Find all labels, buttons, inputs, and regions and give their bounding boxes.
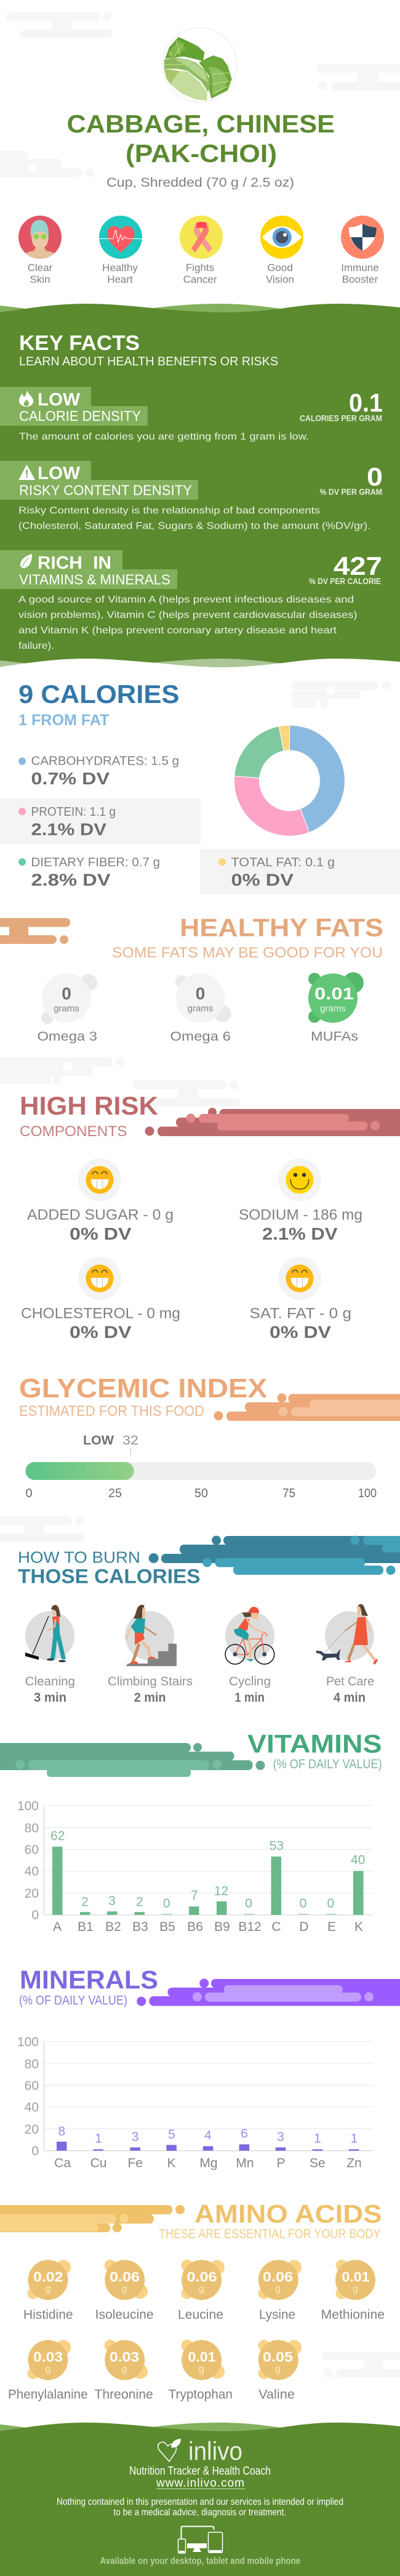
legend: protein: 2.1% DV xyxy=(31,820,106,839)
benefit: healthy heart xyxy=(99,216,142,259)
amino: lysine: 0.06 xyxy=(263,2269,293,2285)
minerals subheading: (% OF DAILY VALUE) xyxy=(19,1993,127,2007)
activity: climbing stairs: 2 min xyxy=(134,1691,166,1705)
description: (Cholesterol, Saturated Fat, Sugars & Sodium) to the amount (%DV/gr). xyxy=(18,521,370,531)
label: clear skin xyxy=(28,262,53,285)
amino: histidine: Histidine xyxy=(23,2307,73,2322)
description xyxy=(18,595,357,651)
mufas xyxy=(308,972,364,1044)
saturated fat: SAT. FAT - 0 g xyxy=(250,1306,351,1322)
unit: CALORIES PER GRAM xyxy=(300,414,382,423)
bar chart: minerals: 60 xyxy=(25,2079,39,2093)
amino: histidine xyxy=(23,2260,73,2322)
bar chart: vitamins: 2 xyxy=(136,1895,143,1909)
bar chart: vitamins: 100 xyxy=(17,1799,39,1813)
glycemic value label: 32 xyxy=(122,1434,138,1448)
bar chart: minerals: 100 xyxy=(17,2035,39,2049)
bar chart: minerals: 3 xyxy=(277,2130,284,2144)
bar chart: minerals: 0 xyxy=(31,2144,39,2158)
amino: valine: g xyxy=(275,2364,281,2375)
label: fights cancer xyxy=(183,262,217,285)
amino: threonine: Threonine xyxy=(94,2387,153,2402)
activity: cycling: 1 min xyxy=(234,1691,265,1705)
legend: protein xyxy=(0,798,201,844)
amino: threonine xyxy=(94,2340,153,2402)
label: good vision: Vision xyxy=(266,274,294,285)
bar chart: minerals: 1 xyxy=(351,2131,358,2145)
activity: pet care: Pet Care xyxy=(326,1675,374,1689)
bar chart: minerals: 1 xyxy=(314,2131,321,2145)
brush decoration xyxy=(0,918,70,944)
mufas: MUFAs xyxy=(311,1030,358,1044)
amino: lysine: g xyxy=(275,2283,281,2294)
legend: dietary fiber: 2.8% DV xyxy=(31,871,111,890)
bar chart: vitamins: 40 xyxy=(351,1853,365,1867)
label: fights cancer: Cancer xyxy=(183,274,217,285)
bar chart: vitamins: 0 xyxy=(245,1896,252,1911)
bar chart: vitamins: B3 xyxy=(132,1920,148,1934)
description: The amount of calories you are getting from 1 gram is low. xyxy=(19,431,309,442)
added sugar: 0% DV xyxy=(70,1224,132,1243)
availability note: Available on your desktop, tablet and mobile phone xyxy=(100,2556,300,2566)
label: clear skin: Skin xyxy=(30,274,50,285)
bar chart: vitamins: 0 xyxy=(163,1896,170,1911)
amino: methionine: 0.01 xyxy=(342,2269,369,2285)
key facts heading: KEY FACTS xyxy=(19,331,140,355)
high risk heading: HIGH RISK xyxy=(20,1091,158,1120)
bar chart: vitamins: B2 xyxy=(105,1920,121,1934)
omega 3: grams xyxy=(54,1004,79,1014)
bar chart: vitamins: B1 xyxy=(78,1920,94,1934)
title: CABBAGE, CHINESE xyxy=(66,110,335,138)
label: healthy heart: Heart xyxy=(107,274,133,285)
icon: leaf xyxy=(20,554,32,568)
saturated fat: 0% DV xyxy=(270,1322,331,1342)
bar chart: minerals: P xyxy=(276,2156,286,2170)
legend: protein: PROTEIN: 1.1 g xyxy=(31,805,116,819)
label: immune booster xyxy=(341,262,379,285)
website: www.inlivo.com xyxy=(156,2477,244,2490)
panel: footer xyxy=(0,2423,400,2576)
bar chart: minerals: 8 xyxy=(58,2124,65,2139)
description: failure). xyxy=(18,641,54,651)
panel: calories xyxy=(0,680,400,895)
benefit: immune booster xyxy=(341,216,384,259)
low label: LOW xyxy=(38,463,81,483)
legend: dietary fiber: DIETARY FIBER: 0.7 g xyxy=(31,856,160,869)
activity: climbing stairs: Climbing Stairs xyxy=(108,1675,193,1689)
label: fights cancer: Fights xyxy=(186,262,214,274)
legend: carbohydrates xyxy=(18,755,179,788)
panel: amino acids xyxy=(0,2200,385,2402)
amino: tryptophan xyxy=(169,2340,233,2402)
bar chart: vitamins: B6 xyxy=(187,1920,203,1934)
activity: cleaning: Cleaning xyxy=(25,1675,75,1689)
bar chart: vitamins: 62 xyxy=(50,1829,65,1843)
bar chart: vitamins: D xyxy=(299,1920,309,1934)
omega 3: Omega 3 xyxy=(37,1030,97,1044)
amino acids heading: AMINO ACIDS xyxy=(194,2200,382,2229)
bar chart: minerals: 20 xyxy=(25,2123,39,2137)
icon: flame xyxy=(19,390,33,407)
activity: climbing stairs xyxy=(108,1605,193,1705)
panel: glycemic index xyxy=(19,1373,400,1500)
brush decoration xyxy=(137,1979,400,2006)
mufas: grams xyxy=(320,1004,346,1014)
description: and Vitamin K (helps prevent coronary artery disease and heart xyxy=(18,625,337,636)
label: immune booster: Booster xyxy=(342,274,378,285)
value: 0.1 xyxy=(349,388,383,417)
bar chart: minerals: 1 xyxy=(95,2131,102,2145)
bar chart: vitamins: C xyxy=(271,1920,281,1934)
omega 6 xyxy=(170,973,231,1044)
amino: valine: 0.05 xyxy=(263,2349,293,2365)
minerals heading: MINERALS xyxy=(20,1965,158,1994)
value: 427 xyxy=(334,551,382,580)
glycemic axis xyxy=(26,1487,377,1500)
omega 6: Omega 6 xyxy=(170,1030,231,1044)
glycemic axis: 25 xyxy=(108,1487,122,1500)
amino: leucine xyxy=(178,2260,225,2322)
bar chart: minerals xyxy=(17,2035,372,2170)
rich in label: RICH IN xyxy=(38,553,111,573)
panel: vitamins xyxy=(0,1729,382,1934)
label: good vision: Good xyxy=(267,262,293,274)
amino: leucine: 0.06 xyxy=(187,2269,217,2285)
sodium: 2.1% DV xyxy=(262,1224,338,1243)
description: vision problems), Vitamin C (helps prevent cardiovascular diseases) xyxy=(18,610,357,620)
legend: total fat: TOTAL FAT: 0.1 g xyxy=(231,856,335,869)
bar chart: vitamins: 7 xyxy=(191,1888,198,1903)
amino: phenylalanine: 0.03 xyxy=(33,2349,63,2365)
bar chart: vitamins: 40 xyxy=(25,1864,39,1879)
bar chart: vitamins: E xyxy=(327,1920,336,1934)
bar chart: minerals: 3 xyxy=(132,2130,139,2144)
description xyxy=(18,506,370,531)
amino: lysine: Lysine xyxy=(259,2307,295,2322)
brush decoration xyxy=(149,1535,400,1575)
healthy fats subheading: SOME FATS MAY BE GOOD FOR YOU xyxy=(112,945,383,961)
saturated fat xyxy=(250,1257,351,1342)
bar chart: vitamins: B5 xyxy=(159,1920,175,1934)
low label: LOW xyxy=(38,390,81,410)
brush decoration xyxy=(0,1743,265,1777)
omega 6: 0 xyxy=(196,984,205,1003)
burn heading line 1: HOW TO BURN xyxy=(18,1548,140,1566)
amino: methionine: Methionine xyxy=(321,2307,385,2322)
panel: key facts xyxy=(0,304,400,667)
amino: tryptophan: 0.01 xyxy=(188,2349,215,2365)
glycemic index heading: GLYCEMIC INDEX xyxy=(19,1373,267,1404)
bar chart: minerals: 40 xyxy=(25,2100,39,2115)
bar chart: minerals: Mg xyxy=(199,2156,218,2170)
amino: leucine: Leucine xyxy=(178,2307,223,2322)
logo: heart and leaf xyxy=(158,2439,180,2461)
panel: high risk xyxy=(20,1091,400,1342)
activity: pet care xyxy=(316,1604,378,1705)
from fat subheading: 1 FROM FAT xyxy=(18,712,110,729)
label: healthy heart: Healthy xyxy=(102,262,138,274)
bar chart: vitamins: 0 xyxy=(31,1908,39,1922)
legend: total fat xyxy=(200,849,400,895)
unit: % DV PER GRAM xyxy=(320,487,382,497)
panel: healthy fats xyxy=(0,913,383,1044)
high risk subheading: COMPONENTS xyxy=(20,1123,127,1140)
amino: phenylalanine xyxy=(8,2340,88,2402)
amino: tryptophan: Tryptophan xyxy=(169,2387,233,2402)
activity: pet care: 4 min xyxy=(334,1691,366,1705)
legend: dietary fiber xyxy=(18,856,160,890)
amino: phenylalanine: Phenylalanine xyxy=(8,2387,88,2402)
label: immune booster: Immune xyxy=(341,262,379,274)
amino: methionine: g xyxy=(353,2283,358,2294)
bar chart: vitamins: B12 xyxy=(238,1920,262,1934)
disclaimer: to be a medical advice, diagnosis or treatment. xyxy=(113,2507,286,2517)
glycemic bar xyxy=(26,1462,376,1480)
bar chart: minerals: K xyxy=(167,2156,176,2170)
omega 3 xyxy=(37,973,97,1044)
amino: isoleucine: 0.06 xyxy=(110,2269,140,2285)
glycemic value label xyxy=(83,1434,138,1455)
bar chart: vitamins: 60 xyxy=(25,1843,39,1857)
bar chart: minerals: Cu xyxy=(90,2156,106,2170)
bar chart: vitamins: 2 xyxy=(81,1895,89,1909)
description: Risky Content density is the relationship of bad components xyxy=(18,506,320,516)
glycemic index subheading: ESTIMATED FOR THIS FOOD xyxy=(19,1403,204,1420)
activity: cycling: Cycling xyxy=(229,1675,271,1689)
cholesterol: CHOLESTEROL - 0 mg xyxy=(21,1306,180,1322)
bar chart: minerals: Zn xyxy=(346,2156,362,2170)
logo wordmark: inlivo xyxy=(188,2437,242,2466)
activity: cycling xyxy=(225,1607,274,1705)
amino: histidine: 0.02 xyxy=(33,2269,63,2285)
bar chart: minerals: 80 xyxy=(25,2057,39,2071)
omega 6: grams xyxy=(188,1004,213,1014)
benefit: good vision xyxy=(260,216,303,259)
panel: burn calories xyxy=(18,1535,400,1705)
bar chart: minerals: 5 xyxy=(168,2127,175,2142)
tagline: Nutrition Tracker & Health Coach xyxy=(129,2464,271,2477)
bar chart: vitamins: 3 xyxy=(108,1894,116,1908)
bar chart: minerals: 4 xyxy=(204,2129,212,2143)
amino: tryptophan: g xyxy=(199,2364,204,2375)
glycemic value label: LOW xyxy=(83,1434,114,1448)
serving size: Cup, Shredded (70 g / 2.5 oz) xyxy=(106,176,294,190)
title xyxy=(66,110,335,168)
added sugar xyxy=(27,1158,174,1243)
bar chart: minerals: Ca xyxy=(54,2156,71,2170)
risky content density label: RISKY CONTENT DENSITY xyxy=(19,482,192,498)
bar chart: vitamins: B9 xyxy=(214,1920,230,1934)
donut chart xyxy=(234,725,345,836)
bar chart: minerals: Se xyxy=(310,2156,326,2170)
label: good vision xyxy=(266,262,294,285)
vitamins and minerals label: VITAMINS & MINERALS xyxy=(19,571,170,587)
amino: phenylalanine: g xyxy=(46,2364,50,2375)
legend: total fat: 0% DV xyxy=(231,871,294,890)
icon: devices xyxy=(178,2526,223,2553)
amino: histidine: g xyxy=(46,2283,50,2294)
healthy fats heading: HEALTHY FATS xyxy=(180,913,383,941)
legend: carbohydrates: CARBOHYDRATES: 1.5 g xyxy=(31,755,179,768)
sodium: SODIUM - 186 mg xyxy=(239,1207,362,1224)
mufas: 0.01 xyxy=(314,984,354,1003)
omega 3: 0 xyxy=(62,984,71,1003)
bar chart: vitamins xyxy=(17,1799,372,1934)
calorie density label: CALORIE DENSITY xyxy=(19,408,141,424)
calories heading: 9 CALORIES xyxy=(18,680,180,709)
header: food photo xyxy=(162,28,237,102)
amino: lysine xyxy=(258,2260,302,2322)
amino: methionine xyxy=(321,2260,385,2322)
disclaimer xyxy=(57,2497,343,2517)
disclaimer: Nothing contained in this presentation and our services is intended or implied xyxy=(57,2497,343,2508)
bar chart: vitamins: 53 xyxy=(270,1839,284,1853)
burn heading line 2: THOSE CALORIES xyxy=(18,1566,201,1588)
unit: % DV PER CALORIE xyxy=(309,577,381,586)
label: healthy heart xyxy=(102,262,138,285)
cholesterol xyxy=(21,1257,180,1342)
cholesterol: 0% DV xyxy=(70,1322,132,1342)
description: A good source of Vitamin A (helps prevent infectious diseases and xyxy=(18,595,354,605)
bar chart: vitamins: 0 xyxy=(300,1896,306,1911)
amino: isoleucine: g xyxy=(122,2283,127,2294)
glycemic axis: 75 xyxy=(282,1487,295,1500)
key facts subheading: LEARN ABOUT HEALTH BENEFITS OR RISKS xyxy=(19,355,278,368)
amino: valine xyxy=(258,2340,302,2402)
glycemic axis: 100 xyxy=(358,1487,377,1500)
brush decoration xyxy=(214,1394,400,1421)
vitamins subheading: (% OF DAILY VALUE) xyxy=(273,1757,382,1771)
brush decoration xyxy=(0,2205,185,2232)
bar chart: minerals: Mn xyxy=(236,2156,254,2170)
fact: rich in vitamins and minerals xyxy=(0,550,382,651)
value: 0 xyxy=(367,462,383,491)
amino: leucine: g xyxy=(199,2283,204,2294)
title: (PAK-CHOI) xyxy=(126,139,277,168)
brush decoration xyxy=(145,1108,400,1136)
bar chart: minerals: 6 xyxy=(241,2126,248,2140)
bar chart: vitamins: 12 xyxy=(214,1884,228,1898)
label: clear skin: Clear xyxy=(28,262,53,274)
fact: low calorie density xyxy=(0,387,383,442)
glycemic axis: 0 xyxy=(26,1487,33,1500)
legend: carbohydrates: 0.7% DV xyxy=(31,769,110,788)
benefit: fights cancer xyxy=(180,216,223,259)
panel: minerals xyxy=(17,1965,400,2170)
bar chart: vitamins: 20 xyxy=(25,1887,39,1901)
vitamins heading: VITAMINS xyxy=(247,1729,382,1758)
fact: low risky content density xyxy=(0,461,383,531)
bar chart: vitamins: 0 xyxy=(327,1896,334,1911)
glycemic axis: 50 xyxy=(194,1487,208,1500)
amino: isoleucine xyxy=(95,2260,154,2322)
benefit: clear skin xyxy=(18,216,62,259)
bar chart: minerals: Fe xyxy=(127,2156,143,2170)
amino: threonine: g xyxy=(122,2364,127,2375)
added sugar: ADDED SUGAR - 0 g xyxy=(27,1207,174,1224)
bar chart: vitamins: 80 xyxy=(25,1821,39,1835)
activity: cleaning: 3 min xyxy=(34,1691,66,1705)
bar chart: vitamins: A xyxy=(53,1920,62,1934)
amino: threonine: 0.03 xyxy=(110,2349,139,2365)
bar chart: vitamins: K xyxy=(354,1920,363,1934)
amino: valine: Valine xyxy=(258,2387,295,2402)
icon: warning xyxy=(18,465,35,480)
activity: cleaning xyxy=(25,1605,75,1705)
sodium xyxy=(239,1158,362,1243)
amino: isoleucine: Isoleucine xyxy=(95,2307,154,2322)
